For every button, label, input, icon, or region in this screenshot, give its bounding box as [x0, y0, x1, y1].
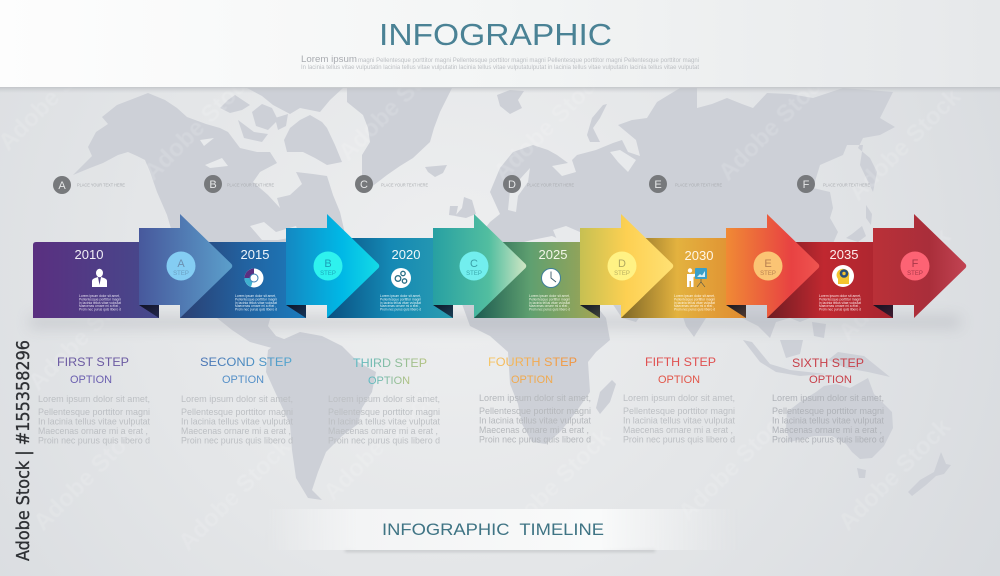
label E: PLACE YOUR TEXT HERE	[675, 182, 722, 188]
icon: gears	[391, 268, 411, 288]
watermarks: Adobe Stock	[488, 63, 612, 186]
column: third step: Lorem ipsum dolor sit amet,	[328, 394, 440, 405]
lakes and inland seas	[200, 138, 636, 242]
column: fifth step: FIFTH STEP	[645, 355, 716, 369]
continent: Greenland	[347, 88, 452, 188]
column: first step: FIRST STEP	[57, 355, 129, 369]
step columns	[38, 355, 884, 446]
column: sixth step: Proin nec purus quis libero d	[772, 434, 884, 446]
arrow: step E: E	[764, 258, 772, 270]
footer title: INFOGRAPHIC TIMELINE	[382, 520, 604, 539]
ribbon: 2015	[180, 242, 306, 318]
arrow: step E	[726, 214, 819, 318]
column: sixth step: OPTION	[809, 374, 852, 386]
column: fourth step: FOURTH STEP	[488, 355, 577, 369]
text block: 2025	[529, 294, 570, 312]
text block: 2015: In lacinia tellus vitae vulputat	[235, 301, 277, 305]
label E	[649, 175, 722, 193]
column: fourth step	[479, 355, 591, 446]
text block: 2025: Pellentesque porttitor magni	[529, 298, 570, 302]
column: second step: Maecenas ornare mi a erat ,	[181, 426, 291, 437]
island: Tasmania	[857, 468, 866, 478]
column: third step: Pellentesque porttitor magni	[328, 407, 440, 418]
label D	[503, 175, 574, 193]
column: second step: In lacinia tellus vitae vulputat	[181, 416, 293, 428]
ribbon: 2010	[33, 242, 159, 318]
column: fourth step: Pellentesque porttitor magni	[479, 406, 591, 417]
text block: 2020: Pellentesque porttitor magni	[380, 298, 421, 302]
text block: 2020: In lacinia tellus vitae vulputat	[380, 301, 421, 305]
footer banner	[265, 509, 740, 552]
title: INFOGRAPHIC	[379, 18, 612, 52]
ribbon contents	[75, 247, 861, 312]
arrow: step C: STEP	[466, 271, 482, 277]
panel: 2025 content: 2025	[539, 247, 567, 262]
arrow: step B: B	[324, 258, 332, 270]
text block: 2025: In lacinia tellus vitae vulputat	[529, 301, 570, 305]
island: New Zealand	[908, 452, 951, 496]
icon: clock	[542, 268, 560, 288]
timeline shadow	[30, 316, 960, 328]
timeline labels	[53, 175, 870, 194]
arrows	[139, 214, 966, 318]
text block: 2010: Maecenas ornare mi a erat ,	[79, 304, 120, 308]
continent: Eurasia	[476, 88, 895, 338]
island: Philippines	[812, 322, 826, 338]
label C: C	[360, 179, 368, 191]
column: third step	[328, 356, 440, 446]
icon: head with gear	[832, 265, 854, 287]
text block: 2015: Pellentesque porttitor magni	[235, 298, 277, 302]
column: sixth step: Lorem ipsum dolor sit amet,	[772, 393, 884, 404]
text block: 2030: Proin nec purus quis libero d	[674, 308, 715, 312]
ribbon: 2020	[327, 238, 453, 318]
arrow: step C	[433, 214, 526, 318]
text block: 2020: Proin nec purus quis libero d	[380, 308, 421, 312]
panel: 2015 content: 2015	[241, 247, 269, 262]
ribbon: 2035	[767, 242, 893, 318]
label C	[355, 175, 428, 193]
ribbons	[33, 238, 893, 318]
column: sixth step: SIXTH STEP	[792, 356, 864, 370]
subtitle: magni Pellentesque porttitor magni Pellentesque porttitor magni magni Pellentesque porttitor magni Pellentesque porttitor magni	[358, 58, 699, 64]
column: fourth step: Maecenas ornare mi a erat ,	[479, 425, 589, 436]
column: first step: In lacinia tellus vitae vulputat	[38, 416, 150, 428]
continent: Australia	[786, 378, 893, 459]
column: sixth step: In lacinia tellus vitae vulputat	[772, 416, 884, 426]
watermarks: Adobe Stock	[138, 63, 262, 186]
arrow: step B: STEP	[320, 271, 336, 277]
text block: 2035: In lacinia tellus vitae vulputat	[819, 301, 861, 305]
island: United Kingdom	[455, 197, 476, 218]
island: Madagascar	[596, 380, 616, 414]
text block: 2010: Lorem ipsum dolor sit amet,	[79, 294, 120, 298]
text block: 2025: Proin nec purus quis libero d	[529, 308, 570, 312]
column: first step: Proin nec purus quis libero d	[38, 436, 150, 446]
text block: 2010: Pellentesque porttitor magni	[79, 298, 121, 302]
text block: 2030: Lorem ipsum dolor sit amet,	[674, 294, 715, 298]
island: Novaya Zemlya	[587, 104, 607, 142]
continent: South America	[266, 332, 376, 500]
arrow: step F	[873, 214, 966, 318]
column: fifth step: In lacinia tellus vitae vulputat	[623, 416, 735, 426]
text block: 2035: Maecenas ornare mi a erat ,	[819, 304, 860, 308]
text block: 2025: Lorem ipsum dolor sit amet,	[529, 294, 570, 298]
arrow: step B	[286, 214, 379, 318]
island: Sakhalin	[866, 205, 872, 225]
header band	[0, 0, 1000, 93]
island: Borneo	[780, 340, 803, 358]
island: Japan	[846, 226, 866, 242]
column: third step: Proin nec purus quis libero d	[328, 436, 440, 446]
column: third step: Maecenas ornare mi a erat ,	[328, 426, 438, 437]
panel: 2035 content: 2035	[830, 247, 858, 262]
text block: 2010	[79, 294, 121, 312]
watermarks: Adobe Stock	[673, 403, 797, 526]
arrow: step F: F	[912, 258, 919, 270]
islands: Arctic Archipelago	[220, 88, 343, 165]
text block: 2020: Lorem ipsum dolor sit amet,	[380, 294, 421, 298]
column: third step: OPTION	[368, 375, 410, 387]
column: second step	[181, 355, 293, 446]
column: first step	[38, 355, 150, 446]
arrow: step C: C	[470, 258, 478, 270]
icon: businessman	[92, 269, 107, 287]
panel: 2010 content	[75, 247, 121, 312]
column: second step: Lorem ipsum dolor sit amet,	[181, 394, 293, 405]
watermarks: Adobe Stock	[23, 273, 147, 396]
arrow: step F: STEP	[907, 271, 923, 277]
text block: 2035: Proin nec purus quis libero d	[819, 308, 861, 312]
world map	[73, 88, 951, 500]
watermarks: Adobe Stock	[28, 413, 152, 536]
label E: E	[654, 179, 662, 191]
arrow: step A: A	[177, 258, 185, 270]
panel: 2010 content: 2010	[75, 247, 103, 262]
panel: 2020 content	[380, 247, 421, 312]
icon: donut chart	[244, 268, 264, 288]
ribbon: 2025	[474, 242, 600, 318]
arrow: step A	[139, 214, 232, 318]
text block: 2010: Proin nec purus quis libero d	[79, 308, 121, 312]
panel: 2030 content: 2030	[685, 248, 713, 263]
text block: 2035: Pellentesque porttitor magni	[819, 298, 861, 302]
island: Iceland	[425, 165, 447, 177]
column: fifth step	[623, 355, 735, 446]
column: first step: Pellentesque porttitor magni	[38, 407, 150, 418]
arrow: step E: STEP	[760, 271, 776, 277]
panel: 2020 content: 2020	[392, 247, 420, 262]
islands: Sumatra and Java	[743, 340, 826, 376]
continent: Africa	[462, 246, 610, 444]
column: fourth step: Proin nec purus quis libero d	[479, 434, 591, 446]
column: sixth step	[772, 356, 884, 446]
column: sixth step: Pellentesque porttitor magni	[772, 406, 884, 417]
panel: 2015 content	[235, 247, 277, 312]
subtitle: In lacinia tellus vitae vulputatin lacinia tellus vitae vulputatin lacinia tellus vitae vulputatulputat in lacinia tellus vitae vulputatin lacinia tellus vitae vulputat	[301, 65, 699, 71]
text block: 2030	[674, 294, 715, 312]
watermarks: Adobe Stock	[833, 223, 957, 346]
column: third step: THIRD STEP	[353, 356, 427, 370]
label A: PLACE YOUR TEXT HERE	[77, 182, 125, 188]
text block: 2020: Maecenas ornare mi a erat ,	[380, 304, 420, 308]
column: fourth step: In lacinia tellus vitae vulputat	[479, 416, 591, 426]
label F: PLACE YOUR TEXT HERE	[823, 182, 870, 188]
column: third step: In lacinia tellus vitae vulputat	[328, 416, 440, 428]
label B: PLACE YOUR TEXT HERE	[227, 182, 274, 188]
column: second step: Pellentesque porttitor magni	[181, 407, 293, 418]
text block: 2015: Proin nec purus quis libero d	[235, 308, 277, 312]
label D: PLACE YOUR TEXT HERE	[527, 182, 574, 188]
text block: 2010: In lacinia tellus vitae vulputat	[79, 301, 121, 305]
panel: 2030 content	[674, 248, 715, 312]
text block: 2020	[380, 294, 421, 312]
ribbon: 2030	[621, 238, 746, 318]
continent: North America	[73, 93, 346, 350]
watermarks: Adobe Stock	[713, 63, 837, 186]
arrow: step A: STEP	[173, 271, 189, 277]
stock id text: Adobe Stock | #155358296	[13, 340, 34, 561]
column: fifth step: Proin nec purus quis libero d	[623, 434, 735, 446]
column: fifth step: Pellentesque porttitor magni	[623, 406, 735, 417]
text block: 2035: Lorem ipsum dolor sit amet,	[819, 294, 861, 298]
column: fourth step: OPTION	[511, 374, 553, 386]
watermarks: Adobe Stock	[843, 83, 967, 206]
text block: 2015	[235, 294, 277, 312]
panel: 2035 content	[819, 247, 861, 312]
panel: 2025 content	[529, 247, 570, 312]
island: New Guinea	[828, 352, 890, 377]
column: first step: Maecenas ornare mi a erat ,	[38, 426, 148, 437]
text block: 2015: Maecenas ornare mi a erat ,	[235, 304, 276, 308]
arrow: step D: STEP	[614, 271, 630, 277]
column: first step: OPTION	[70, 374, 112, 386]
island: Ireland	[449, 206, 458, 216]
label F	[797, 175, 870, 193]
arrow: step D: D	[618, 258, 626, 270]
text block: 2015: Lorem ipsum dolor sit amet,	[235, 294, 276, 298]
label D: D	[508, 179, 516, 191]
island: Svalbard	[497, 90, 524, 114]
arrow: step D	[580, 214, 673, 318]
watermarks: Adobe Stock	[833, 413, 957, 536]
icon: presenter at board	[687, 268, 707, 287]
subtitle	[301, 54, 699, 71]
column: second step: Proin nec purus quis libero d	[181, 436, 293, 446]
column: sixth step: Maecenas ornare mi a erat ,	[772, 425, 882, 436]
label C: PLACE YOUR TEXT HERE	[381, 182, 428, 188]
column: fifth step: OPTION	[658, 374, 700, 386]
text block: 2030: Maecenas ornare mi a erat ,	[674, 304, 714, 308]
label B: B	[209, 179, 217, 191]
watermarks: Adobe Stock	[173, 433, 297, 556]
watermarks: Adobe Stock	[493, 423, 617, 546]
column: first step: Lorem ipsum dolor sit amet,	[38, 394, 150, 405]
watermarks: Adobe Stock	[318, 383, 442, 506]
label F: F	[803, 179, 810, 191]
column: second step: SECOND STEP	[200, 355, 292, 369]
text block: 2035	[819, 294, 861, 312]
column: fifth step: Maecenas ornare mi a erat ,	[623, 425, 733, 436]
text block: 2030: Pellentesque porttitor magni	[674, 298, 715, 302]
column: second step: OPTION	[222, 374, 264, 386]
label A	[53, 176, 125, 194]
label A: A	[58, 180, 66, 192]
text block: 2030: In lacinia tellus vitae vulputat	[674, 301, 715, 305]
watermarks: Adobe Stock	[333, 43, 457, 166]
label B	[204, 175, 274, 193]
column: fourth step: Lorem ipsum dolor sit amet,	[479, 393, 591, 404]
subtitle: Lorem ipsum	[301, 54, 357, 64]
text block: 2025: Maecenas ornare mi a erat ,	[529, 304, 569, 308]
column: fifth step: Lorem ipsum dolor sit amet,	[623, 393, 735, 404]
